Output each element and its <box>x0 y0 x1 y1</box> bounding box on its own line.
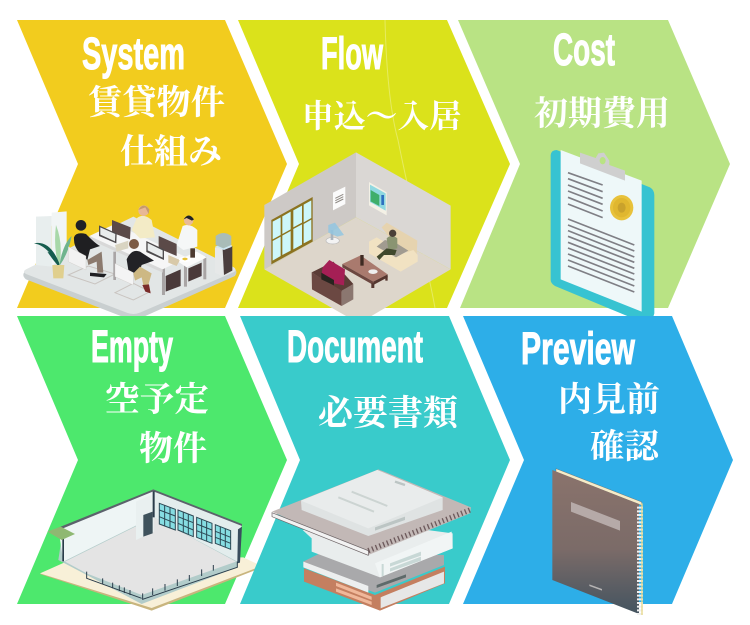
subtitle: cost: 初期費用 <box>534 95 670 133</box>
low table <box>342 255 388 282</box>
title: flow: Flow <box>321 28 384 79</box>
spiral notebook <box>272 469 471 555</box>
white book <box>303 523 453 577</box>
fan <box>326 237 339 244</box>
panel: empty <box>17 316 287 611</box>
illustration: clipboard <box>551 150 654 323</box>
illustration: empty room <box>40 489 263 611</box>
subtitle: preview: 内見前 <box>558 381 660 419</box>
person <box>74 233 100 260</box>
panel: system <box>17 20 287 319</box>
person <box>127 251 154 275</box>
clip <box>580 153 625 181</box>
tv console <box>312 262 353 292</box>
subtitle line 2: system: 仕組み <box>120 133 222 171</box>
poster <box>369 182 387 215</box>
title: document: Document <box>287 321 423 372</box>
subtitle line 2: empty: 物件 <box>139 430 207 468</box>
low wall posts <box>87 562 237 599</box>
subtitle: document: 必要書類 <box>318 394 460 433</box>
coin <box>610 195 633 220</box>
panel: cost <box>458 20 730 323</box>
water cooler <box>215 245 232 276</box>
title: empty: Empty <box>91 321 173 372</box>
notice <box>333 187 345 210</box>
desks <box>89 224 207 295</box>
grey book <box>303 552 444 593</box>
title: cost: Cost <box>553 24 615 75</box>
panel: flow <box>238 20 510 323</box>
illustration: books <box>272 469 471 611</box>
illustration: notebook <box>552 469 643 615</box>
text lines <box>568 173 634 292</box>
person <box>132 216 155 238</box>
illustration: room <box>264 152 451 323</box>
windows <box>159 503 231 549</box>
title: preview: Preview <box>521 323 636 374</box>
panel: preview <box>463 316 733 615</box>
sofa <box>382 223 417 257</box>
subtitle: flow: 申込～入居 <box>302 98 461 134</box>
subtitle: empty: 空予定 <box>105 381 209 419</box>
title: system: System <box>82 28 185 79</box>
window <box>271 197 313 264</box>
bottom book <box>304 567 445 611</box>
illustration: office <box>23 205 236 319</box>
subtitle line 2: preview: 確認 <box>590 428 662 466</box>
panel: document <box>240 316 510 611</box>
person <box>177 225 197 250</box>
subtitle: system: 賃貸物件 <box>88 84 225 122</box>
